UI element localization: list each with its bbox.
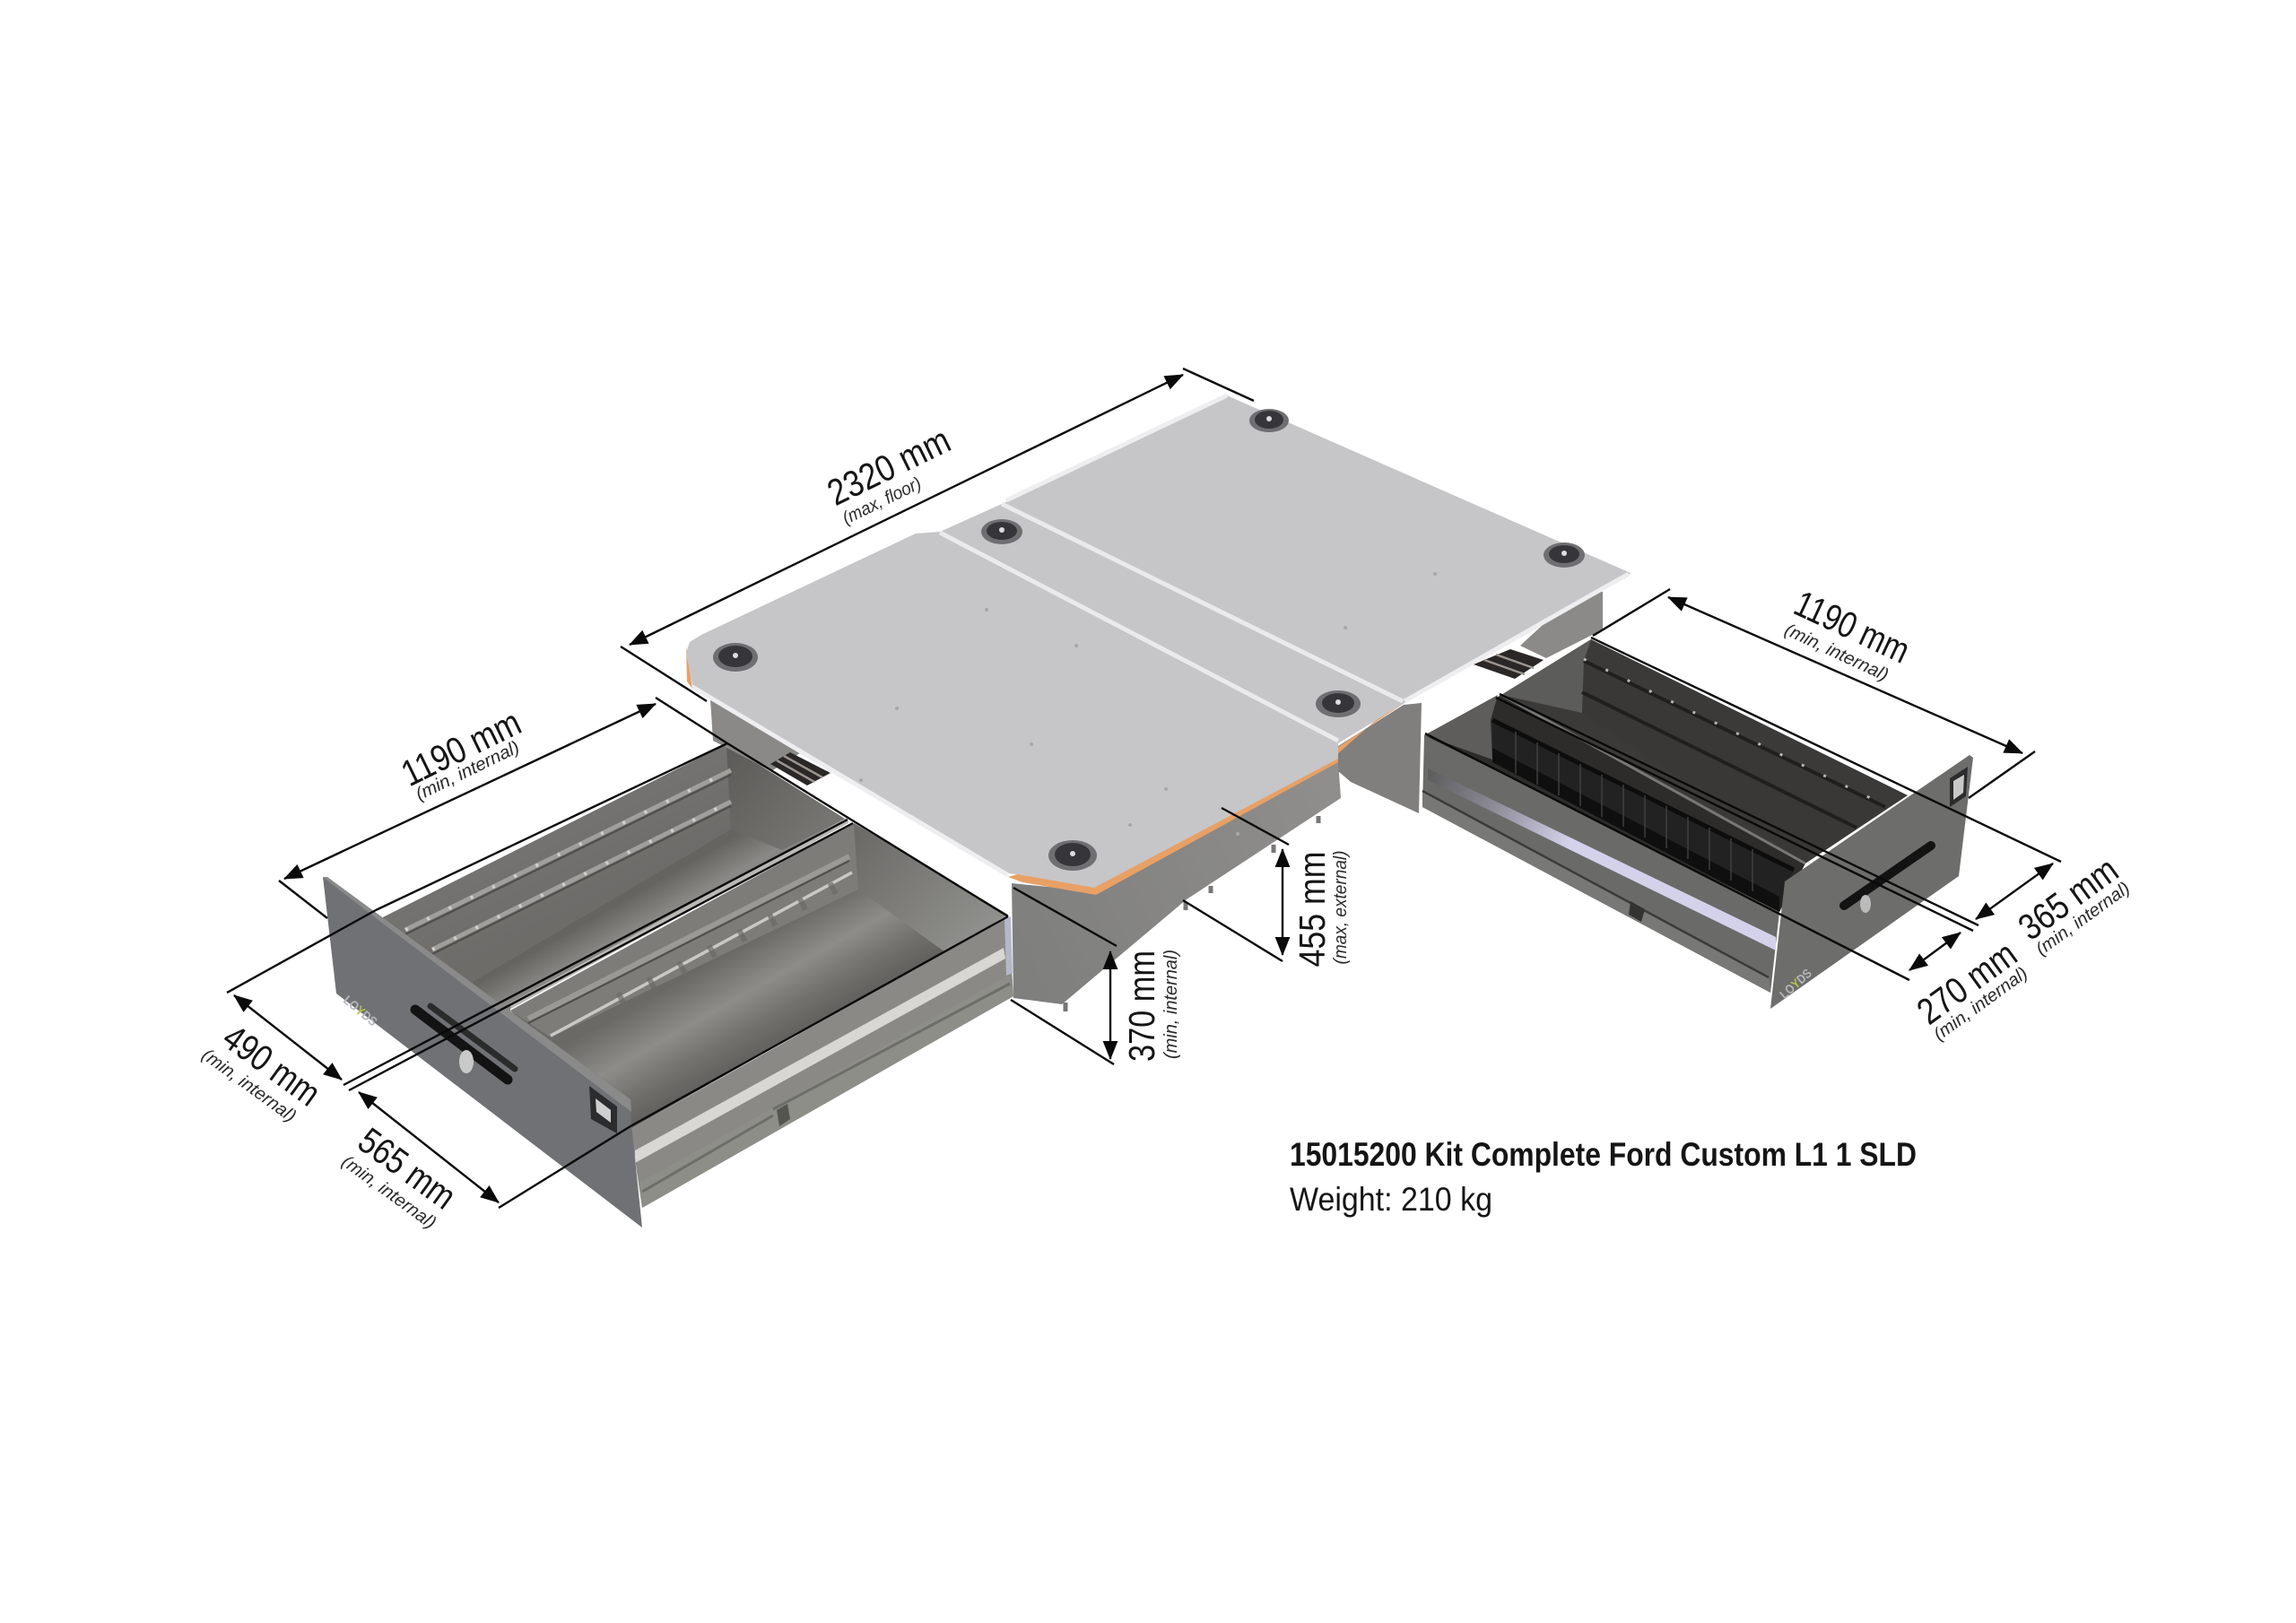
dimension: 2320 mm (621, 369, 1254, 701)
left drawer (323, 744, 1013, 1228)
dimension: 270 mm (1425, 698, 2031, 1045)
feet (1065, 816, 1318, 1011)
title: 15015200 Kit Complete Ford Custom L1 1 SLD (1290, 1136, 1917, 1173)
tie-down 3 (981, 519, 1022, 544)
dimension: 455 mm: (max, external) (1331, 850, 1351, 965)
rear left wall (710, 690, 807, 771)
dimension: 365 mm (1500, 638, 2134, 959)
tie-down 4 (1316, 690, 1361, 717)
rear compartment (1501, 639, 1908, 864)
panel surface (686, 395, 1631, 888)
main front wall (1012, 761, 1341, 1004)
floor panel (686, 395, 1631, 895)
central under-body (710, 592, 1603, 1011)
dimension: 270 mm: (min, internal) (1930, 963, 2031, 1045)
dimension: 370 mm: 370 mm (1121, 950, 1162, 1062)
dimension: 490 mm: (min, internal) (198, 1045, 300, 1126)
drawer front panel (323, 877, 642, 1228)
tie-down 1 (1249, 409, 1289, 432)
icon: latch (459, 1050, 474, 1073)
logo: LOYDS (341, 993, 380, 1028)
icon: card holder (1950, 767, 1968, 807)
orange edge (1008, 699, 1405, 895)
weight: Weight: 210 kg (1290, 1181, 1492, 1218)
icon: handle (415, 1006, 515, 1080)
panel screws (861, 574, 1435, 834)
dimension: 365 mm: 365 mm (2011, 849, 2126, 948)
dimension: 270 mm: 270 mm (1909, 933, 2024, 1032)
rollers left (770, 752, 831, 785)
drawer side rail (1422, 735, 1779, 993)
dimension: 2320 mm: 2320 mm (821, 419, 957, 514)
right drawer (1422, 639, 1973, 1009)
dimension: 455 mm: 455 mm (1292, 852, 1333, 967)
tie-down 6 (1048, 840, 1097, 871)
dimension: 370 mm: (min, internal) (1161, 950, 1181, 1059)
icon: handle (1844, 846, 1931, 906)
rollers right (1474, 649, 1544, 679)
dimension: 370 mm (1011, 888, 1181, 1064)
icon: card holder (589, 1086, 617, 1133)
drawer divider rod (510, 820, 848, 1006)
dimension: right 1190 mm: (min, internal) (1781, 621, 1892, 685)
dimension: 490 mm: 490 mm (215, 1017, 328, 1114)
white edges (692, 395, 1629, 875)
front compartment (1424, 695, 1805, 912)
tie-down 2 (1544, 542, 1585, 568)
dimension: 565 mm: 565 mm (351, 1120, 464, 1217)
dimension: right 1190 mm: 1190 mm (1788, 582, 1916, 672)
dimension: left 1190 mm (279, 698, 727, 918)
dimension: left 1190 mm: (min, internal) (413, 737, 523, 804)
tie-down 5 (713, 643, 758, 672)
drawer front panel (1770, 755, 1973, 1009)
logo: LOYDS (1777, 966, 1814, 1002)
dimension: right 1190 mm (1593, 582, 2035, 798)
dimension: 565 mm: (min, internal) (338, 1151, 439, 1233)
rear right wall (1520, 592, 1603, 658)
right compartment (510, 823, 1008, 1129)
seams (940, 504, 1403, 741)
dimension: 365 mm: (min, internal) (2032, 878, 2134, 959)
dimension: 490 mm (198, 743, 848, 1126)
dimension: 565 mm (338, 743, 1008, 1233)
centre block (1338, 703, 1422, 813)
dimension: left 1190 mm: 1190 mm (395, 701, 527, 794)
drawer side rail (631, 916, 1013, 1208)
left compartment (383, 744, 848, 1022)
icon: latch (1860, 895, 1871, 913)
dimension: 2320 mm: (max, floor) (839, 473, 925, 529)
drawer divider (1501, 695, 1805, 864)
dimension: 455 mm (1183, 808, 1351, 967)
